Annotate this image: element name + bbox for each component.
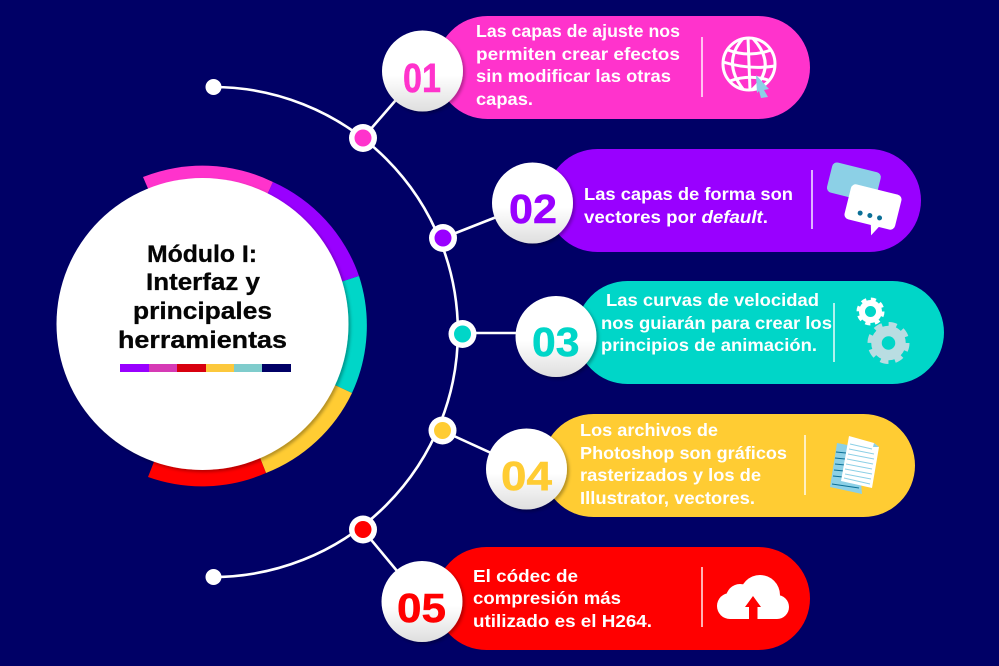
text 05: utilizado es el H264. bbox=[473, 611, 652, 631]
text 02: Las capas de forma son bbox=[584, 184, 793, 204]
panel: 05 bbox=[382, 547, 810, 650]
text 04: Los archivos de bbox=[580, 420, 718, 440]
badge 01: 01 bbox=[403, 55, 441, 101]
icon: gears bbox=[858, 300, 907, 362]
title bbox=[118, 241, 287, 354]
node 02 bbox=[429, 224, 457, 252]
icon: cloud upload bbox=[717, 575, 789, 619]
text 05 bbox=[473, 566, 652, 631]
title: Interfaz y bbox=[146, 269, 261, 296]
icon: chat bubbles bbox=[826, 161, 903, 240]
central module circle bbox=[56, 178, 348, 470]
badge 03 bbox=[516, 296, 596, 377]
node 04 bbox=[428, 416, 456, 444]
badge 05: 05 bbox=[397, 585, 446, 631]
text 05: El códec de bbox=[473, 566, 578, 586]
arc start node bbox=[206, 79, 222, 95]
badge 02: 02 bbox=[509, 186, 557, 232]
node 01 bbox=[349, 124, 377, 152]
text 05: compresión más bbox=[473, 588, 621, 608]
central module ring bbox=[143, 166, 367, 486]
text 01: Las capas de ajuste nos bbox=[476, 21, 680, 41]
icon: documents bbox=[830, 436, 879, 494]
arc end node bbox=[206, 569, 222, 585]
text 03: nos guiarán para crear los bbox=[601, 313, 832, 333]
text 04 bbox=[580, 420, 787, 508]
panel: 02 bbox=[492, 149, 921, 252]
timeline arc bbox=[213, 71, 556, 601]
title colour bar bbox=[120, 364, 291, 372]
text 01: permiten crear efectos bbox=[476, 44, 680, 64]
title: Módulo I: bbox=[147, 241, 257, 268]
badge 04 bbox=[486, 428, 567, 510]
panel: 04 bbox=[486, 414, 915, 517]
icon: globe with cursor bbox=[723, 38, 775, 98]
text 02 bbox=[584, 184, 793, 227]
title: principales bbox=[133, 298, 272, 325]
text 01: capas. bbox=[476, 89, 533, 109]
node 05 bbox=[349, 516, 377, 544]
divider 02 bbox=[811, 170, 813, 229]
badge 03: 03 bbox=[532, 319, 580, 365]
divider 05 bbox=[701, 567, 703, 627]
text 01: sin modificar las otras bbox=[476, 66, 671, 86]
text 03 bbox=[601, 290, 832, 355]
text 04: Photoshop son gráficos bbox=[580, 443, 787, 463]
divider 03 bbox=[833, 303, 835, 362]
badge 02 bbox=[492, 162, 573, 244]
panel: 03 bbox=[516, 281, 944, 384]
text 04: Illustrator, vectores. bbox=[580, 488, 755, 508]
divider 04 bbox=[804, 435, 806, 495]
title: herramientas bbox=[118, 327, 287, 354]
panel: 01 bbox=[382, 16, 810, 119]
node 03 bbox=[448, 320, 476, 348]
text 02: vectores por default. bbox=[584, 207, 768, 227]
text 04: rasterizados y los de bbox=[580, 465, 761, 485]
text 03: Las curvas de velocidad bbox=[606, 290, 819, 310]
text 01 bbox=[476, 21, 680, 109]
divider 01 bbox=[701, 37, 703, 97]
badge 04: 04 bbox=[501, 453, 552, 499]
text 03: principios de animación. bbox=[601, 335, 817, 355]
badge 01 bbox=[382, 30, 463, 112]
badge 05 bbox=[382, 561, 462, 642]
